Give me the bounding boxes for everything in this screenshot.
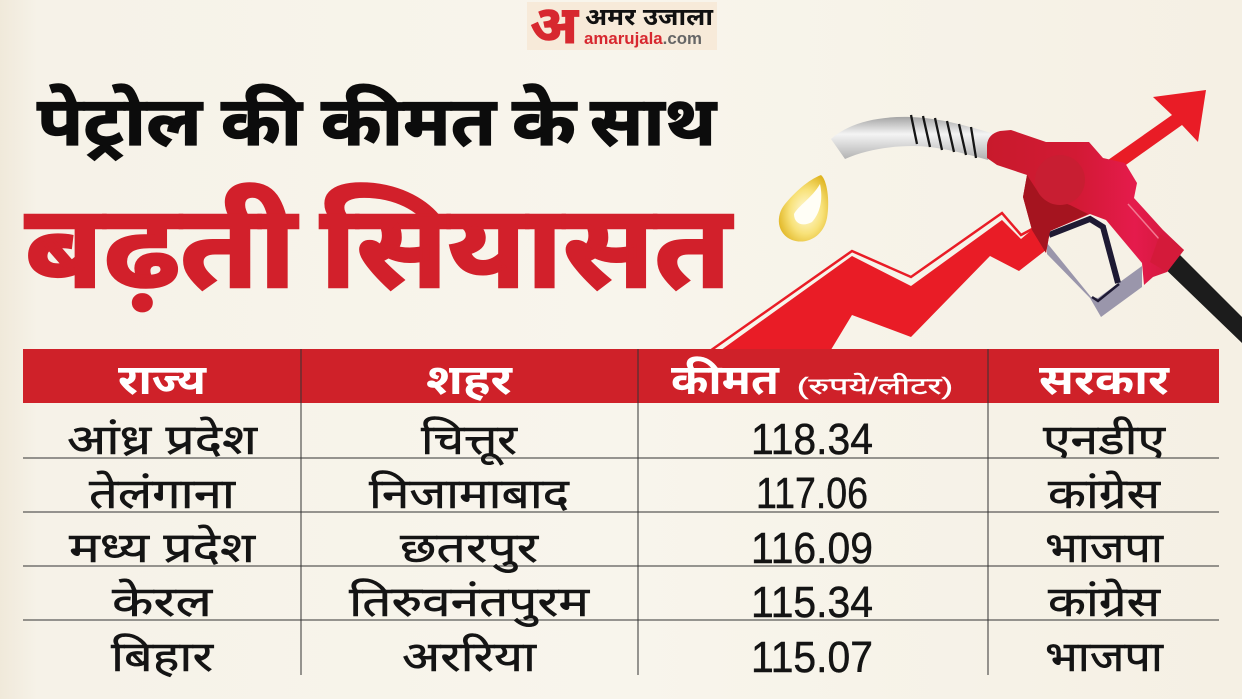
spout coils: [911, 115, 976, 158]
row 4: कांग्रेस: [1048, 578, 1161, 625]
table: कीमत: [671, 356, 780, 403]
row 2: [89, 469, 1161, 518]
title line 1: साथ: [590, 84, 718, 160]
row 4: केरल: [112, 578, 214, 625]
row 2: तेलंगाना: [89, 470, 236, 517]
row 4: 115.34: [751, 578, 873, 627]
row 2: 117.06: [756, 469, 868, 518]
title line 1: के: [512, 84, 578, 160]
row 1: एनडीए: [1043, 416, 1166, 463]
row 1: चित्तूर: [421, 416, 518, 465]
row 5: बिहार: [111, 633, 214, 680]
nozzle spout: [831, 117, 994, 160]
title line 1: कीमत: [321, 84, 498, 160]
trigger guard: [1047, 243, 1142, 317]
row 5: भाजपा: [1045, 633, 1164, 680]
shaded lower left: [1023, 175, 1088, 253]
logo: Amar Ujala: अमर उजाला: [585, 4, 714, 31]
icon: oil drop: [779, 175, 828, 242]
hose: [1158, 247, 1242, 343]
table grid: [23, 349, 1219, 675]
highlights: [1128, 204, 1160, 240]
title line 2: [25, 182, 733, 312]
row 3: 116.09: [751, 524, 873, 573]
row 5: [111, 633, 1164, 682]
table: शहर: [426, 356, 514, 403]
icon: rising red zigzag arrow: [700, 90, 1206, 358]
title line 2: सियासत: [320, 182, 733, 312]
row 2: निजामाबाद: [369, 470, 570, 517]
table: (रुपये/लीटर): [797, 373, 953, 399]
row 1: [67, 415, 1166, 465]
row 4: तिरुवनंतपुरम: [349, 578, 590, 627]
row 5: अररिया: [402, 633, 537, 680]
icon: fuel pump nozzle: [831, 115, 1242, 343]
title line 1: [37, 84, 718, 160]
row 3: [69, 524, 1164, 573]
table header: [23, 349, 1219, 403]
title line 1: की: [221, 84, 304, 160]
row 2: कांग्रेस: [1048, 470, 1161, 517]
table: [23, 349, 1219, 682]
header labels: राज्य: [118, 356, 207, 403]
title line 1: पेट्रोल: [37, 84, 204, 160]
row 1: आंध्र प्रदेश: [67, 416, 259, 463]
title line 2: बढ़ती: [25, 182, 298, 312]
row 3: भाजपा: [1045, 524, 1164, 571]
logo: Amar Ujala: amarujala.com: [584, 29, 702, 48]
logo: Amar Ujala: [527, 0, 717, 55]
row 4: [112, 578, 1161, 627]
row 3: छतरपुर: [400, 524, 539, 573]
row 3: मध्य प्रदेश: [69, 524, 257, 571]
pivot circle: [1035, 155, 1085, 205]
table: सरकार: [1039, 356, 1171, 403]
handle: [1049, 219, 1118, 283]
row 5: 115.07: [751, 633, 873, 682]
pump body: [987, 130, 1184, 285]
row 1: 118.34: [751, 415, 873, 464]
